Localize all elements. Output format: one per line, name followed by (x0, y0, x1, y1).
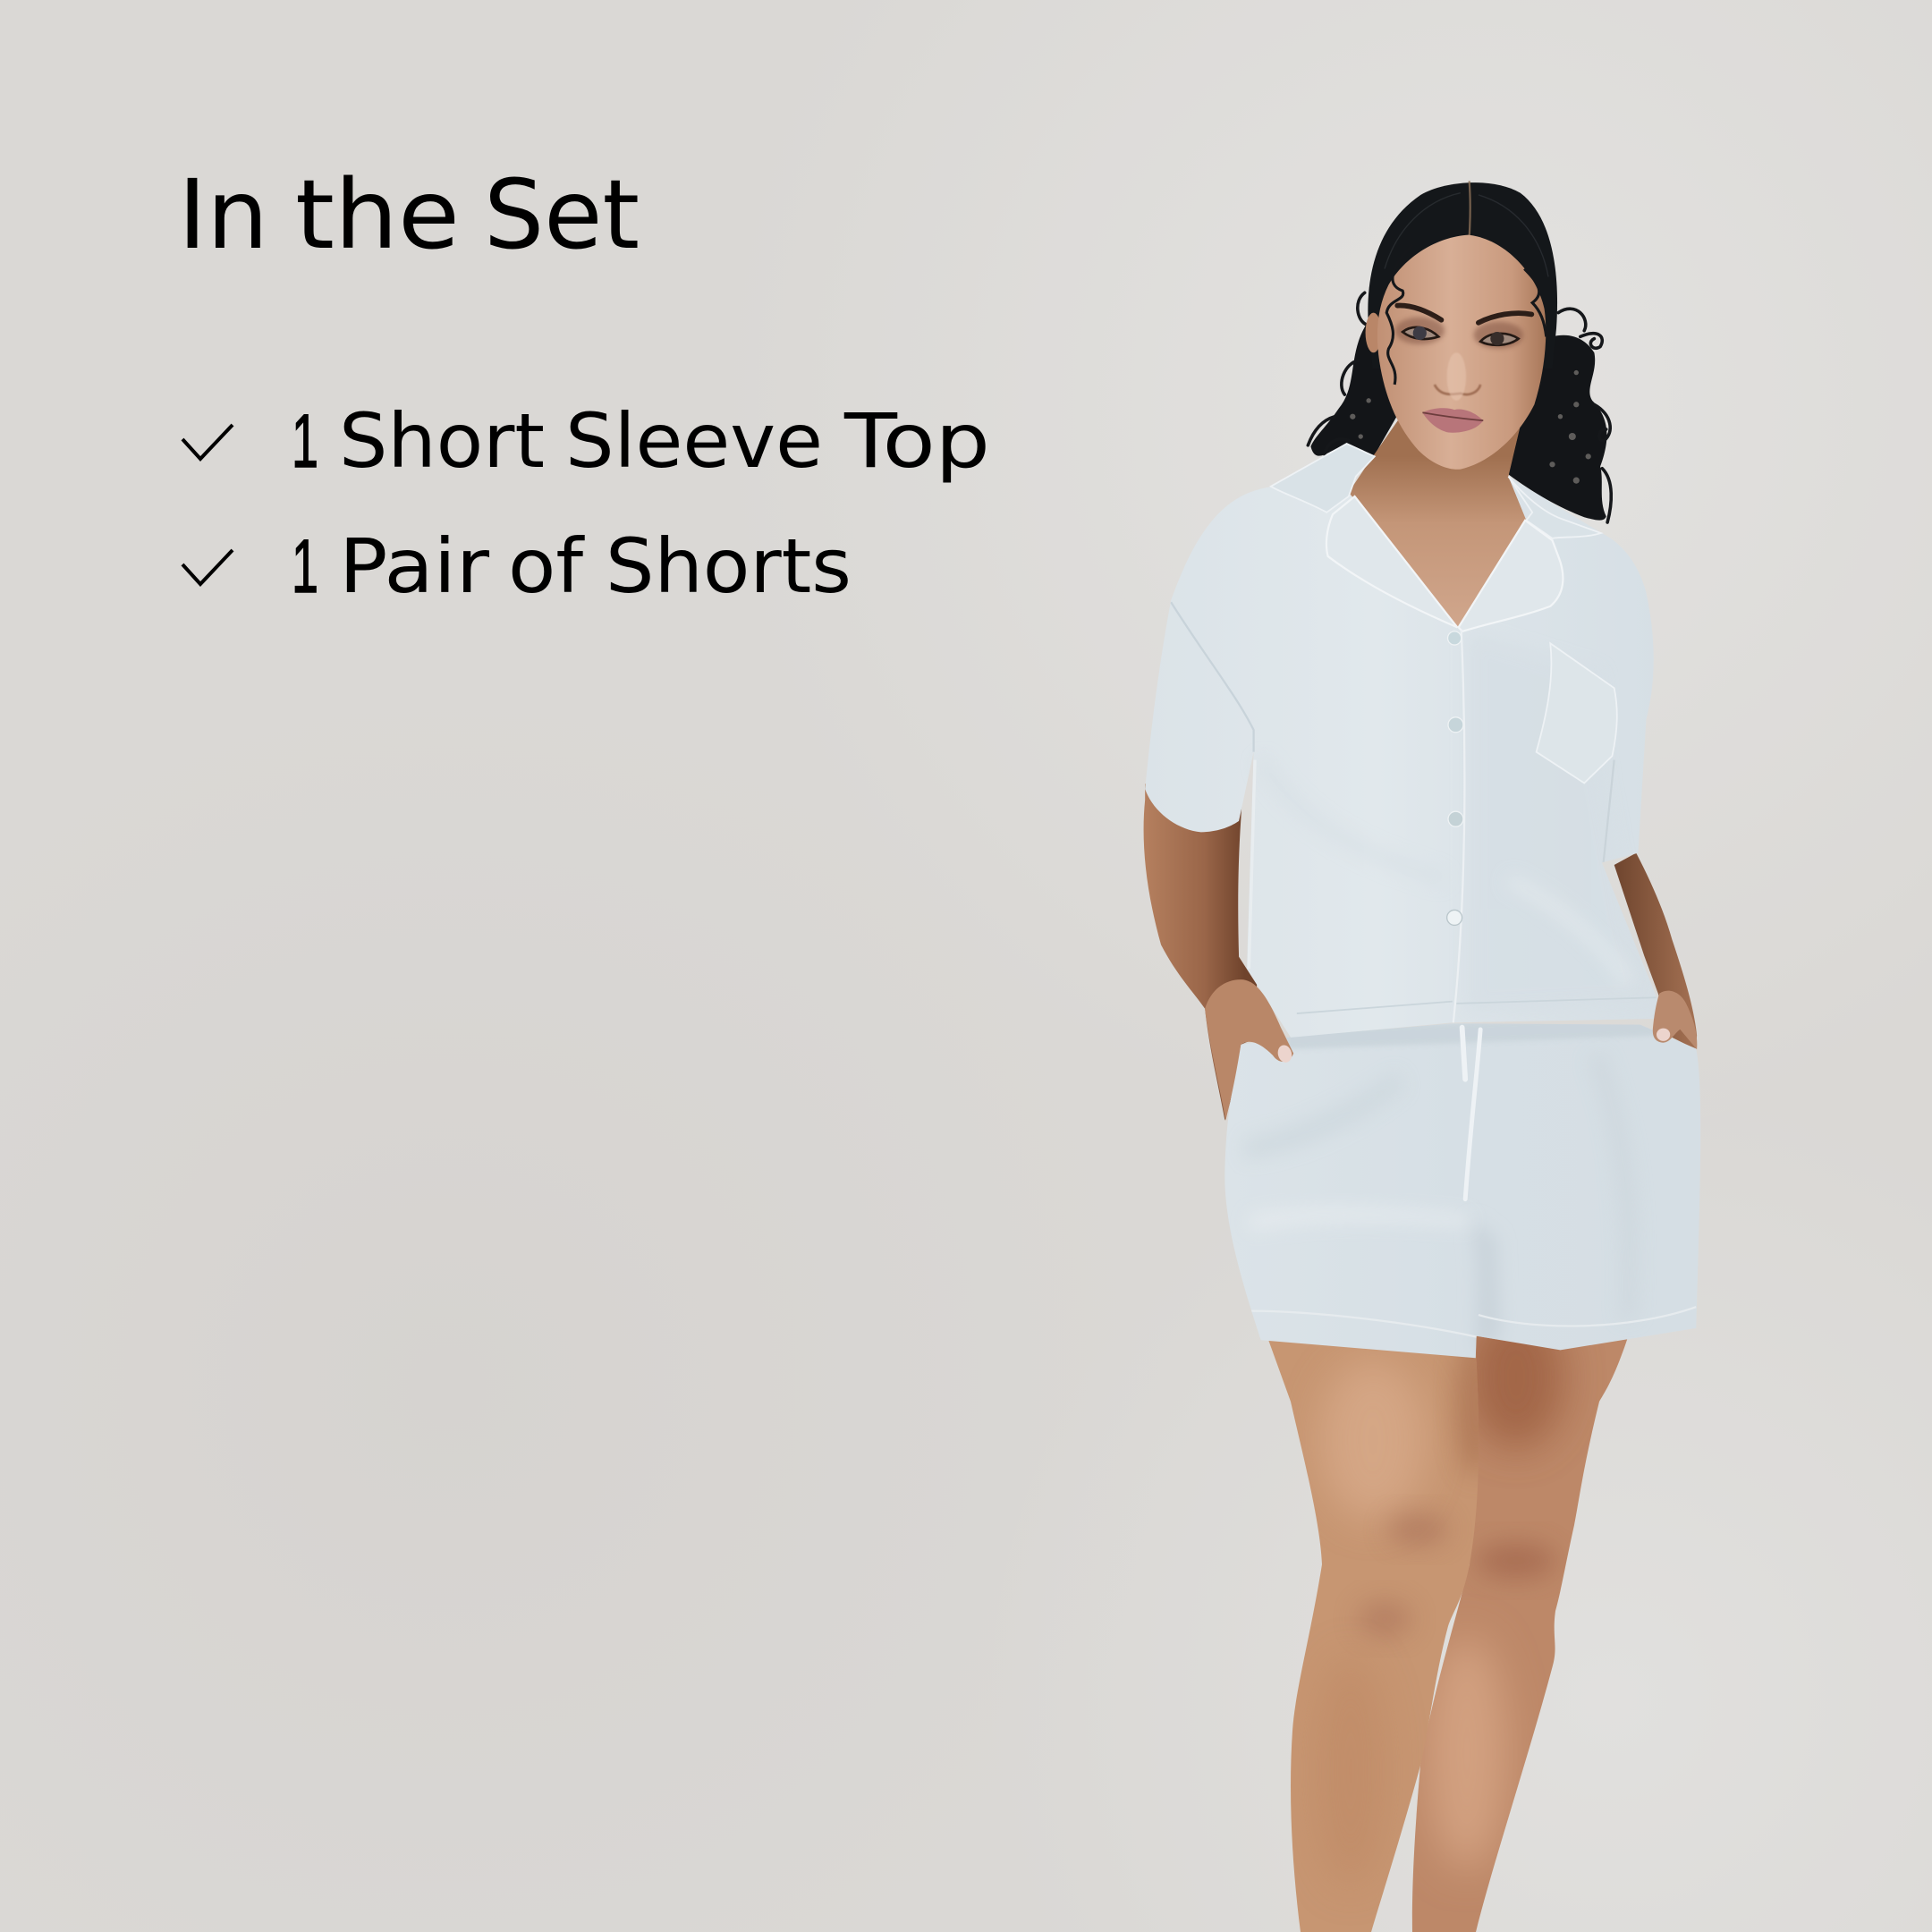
item: shorts: 1 (292, 524, 318, 608)
title: the (295, 160, 460, 271)
item: shorts: Shorts (606, 522, 852, 610)
item: short sleeve top (182, 397, 990, 485)
item: short sleeve top: Sleeve (565, 397, 823, 485)
hair strands (1385, 193, 1548, 276)
placket (1453, 631, 1464, 1022)
item: short sleeve top: 1 (292, 399, 318, 483)
lapels (1326, 496, 1563, 631)
left hand (1205, 979, 1293, 1121)
shirt (1145, 444, 1660, 1038)
item: shorts: of (508, 522, 586, 610)
brows (1397, 306, 1531, 323)
photo: model in pyjama set (1144, 181, 1700, 1932)
back hair (1308, 292, 1611, 522)
right arm (1614, 853, 1697, 1049)
lips (1422, 408, 1483, 433)
face (1377, 235, 1546, 470)
left arm (1144, 784, 1257, 1121)
item: shorts (182, 522, 852, 610)
item: shorts: Pair (339, 522, 489, 610)
neck and chest (1349, 409, 1526, 627)
hair cap (1368, 182, 1557, 369)
drawstring (1462, 1028, 1480, 1199)
item: short sleeve top: Top (843, 397, 990, 485)
title: Set (484, 160, 640, 271)
collar (1271, 444, 1601, 538)
title: In (178, 160, 268, 271)
right leg (1412, 1306, 1628, 1932)
nail (1657, 1029, 1670, 1041)
checklist (182, 397, 990, 610)
item: short sleeve top: Short (339, 397, 545, 485)
ear (1366, 313, 1381, 352)
nail (1276, 1044, 1293, 1064)
nose (1435, 352, 1480, 401)
pocket (1537, 643, 1617, 783)
front curls (1386, 245, 1546, 385)
eyes (1395, 318, 1523, 349)
right hand (1653, 991, 1697, 1049)
buttons (1447, 631, 1463, 925)
shorts (1224, 1015, 1700, 1358)
left leg (1267, 1333, 1496, 1932)
head (1366, 181, 1557, 470)
